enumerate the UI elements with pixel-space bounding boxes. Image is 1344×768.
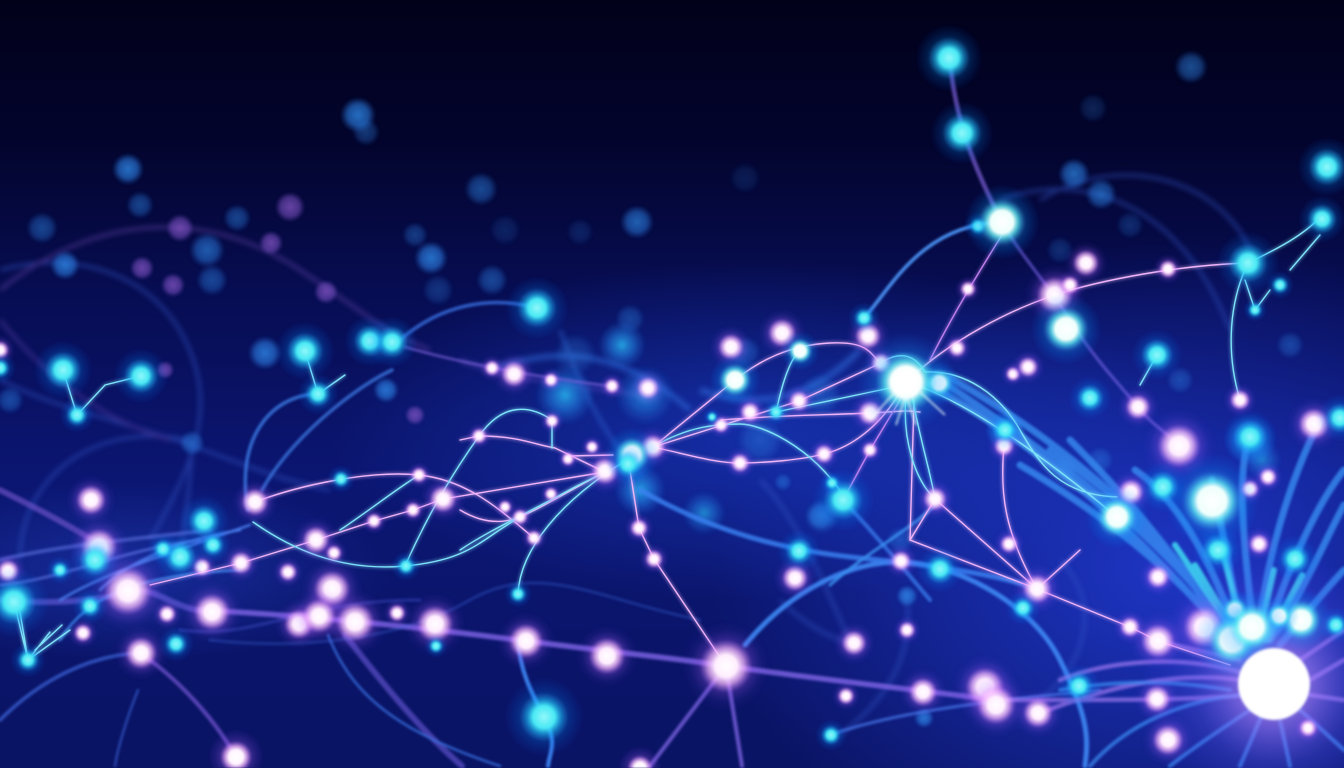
fine network lines: pink xyxy=(150,235,1248,666)
central brilliant node xyxy=(856,332,956,432)
large bright hub glow xyxy=(1139,549,1344,768)
fine network lines: cyan xyxy=(14,215,1322,660)
large hub core xyxy=(1238,648,1310,720)
small network nodes: pink and white xyxy=(186,269,1086,588)
pink glowing nodes xyxy=(0,240,1342,768)
out-of-focus background lines xyxy=(0,175,1250,735)
bright white-core nodes xyxy=(604,184,1299,678)
fan of light strands from the large hub xyxy=(930,378,1344,766)
